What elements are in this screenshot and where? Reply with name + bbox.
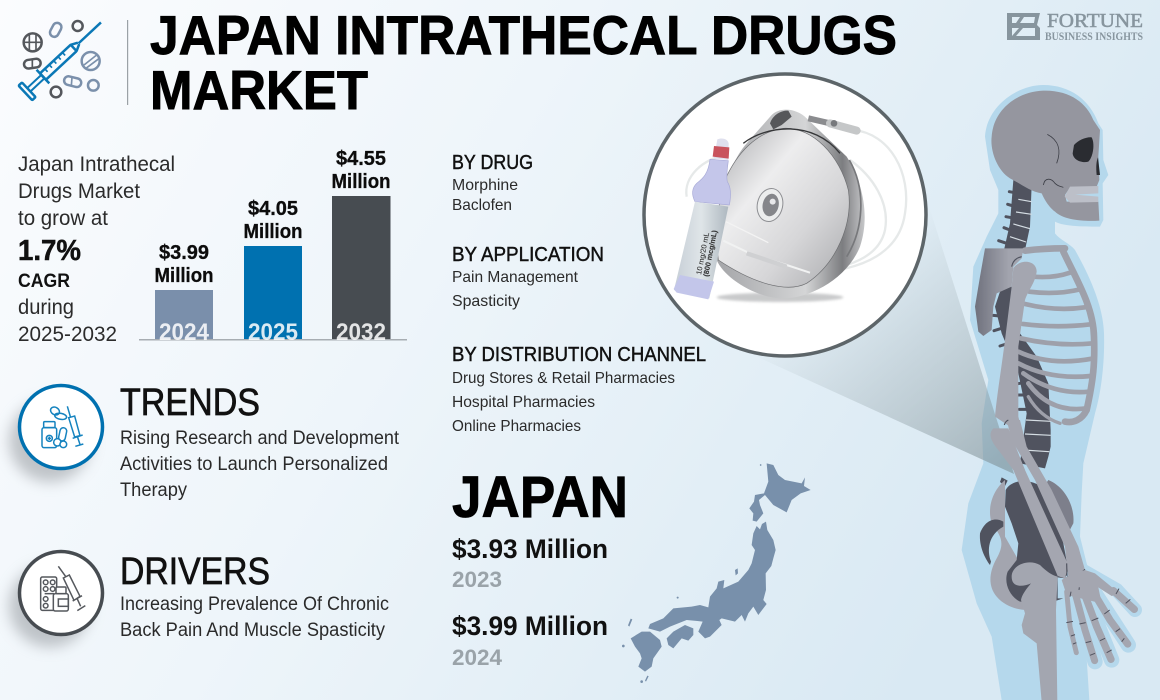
- humerus: [995, 262, 1037, 427]
- catheter tubes: [686, 130, 906, 273]
- bar chart: [139, 148, 407, 346]
- bar chart: 2025: [248, 319, 298, 346]
- panel: segmentation: Hospital Pharmacies: [452, 394, 595, 411]
- icon: syringe and pills: [19, 15, 108, 100]
- title: [150, 4, 897, 121]
- icon: drivers medicine: [9, 552, 102, 647]
- bar chart: 2024: [159, 319, 209, 346]
- vial label: 10 mg/20 mL: [694, 232, 711, 275]
- text block: CAGR summary: during: [18, 296, 74, 319]
- panel: segmentation: Spasticity: [452, 293, 520, 310]
- spine: [993, 180, 1051, 468]
- vial label: (800 mcg/mL): [701, 229, 719, 277]
- title: JAPAN INTRATHECAL DRUGS: [150, 4, 897, 66]
- logo: Fortune Business Insights: FORTUNE: [1047, 10, 1143, 32]
- forearm: [991, 420, 1085, 578]
- text block: CAGR summary: to grow at: [18, 207, 108, 230]
- text block: CAGR summary: Drugs Market: [18, 180, 140, 203]
- panel: Japan values: $3.99 Million: [452, 611, 608, 641]
- text block: CAGR summary: 1.7%: [18, 235, 81, 267]
- text block: CAGR summary: 2025-2032: [18, 323, 117, 346]
- connector: [808, 118, 830, 123]
- panel: segmentation: Drug Stores & Retail Pharmacies: [452, 370, 675, 387]
- text block: drivers: Back Pain And Muscle Spasticity: [120, 620, 385, 641]
- heading: drivers: DRIVERS: [120, 551, 270, 593]
- panel: segmentation: BY DRUG: [452, 152, 533, 174]
- vial label: [694, 227, 719, 277]
- bar chart: $3.99: [159, 242, 209, 264]
- illustration: skeleton: [727, 85, 1135, 700]
- panel: Japan values: 2024: [452, 645, 503, 670]
- divider: [127, 20, 128, 105]
- skull: [991, 91, 1100, 221]
- text block: trends: Therapy: [120, 480, 187, 501]
- panel: Japan values: JAPAN: [452, 465, 628, 530]
- panel: segmentation: Morphine: [452, 177, 518, 194]
- title: MARKET: [150, 59, 368, 121]
- text block: CAGR summary: Japan Intrathecal: [18, 153, 175, 176]
- panel: segmentation: BY DISTRIBUTION CHANNEL: [452, 344, 706, 366]
- map: Japan: [622, 463, 811, 683]
- pump shadow: [717, 293, 843, 302]
- panel: segmentation: Online Pharmacies: [452, 418, 581, 435]
- bar chart: Million: [332, 171, 390, 193]
- text block: trends: Rising Research and Development: [120, 428, 400, 449]
- vial: [674, 139, 731, 299]
- pump body: [716, 110, 865, 298]
- text block: trends: [120, 428, 400, 501]
- pelvis and leg: [980, 477, 1074, 700]
- callout cone: [727, 175, 1014, 474]
- panel: Japan values: 2023: [452, 567, 502, 592]
- image circle: pump and vial: [644, 74, 926, 356]
- logo: Fortune Business Insights: BUSINESS INSIGHTS: [1045, 31, 1143, 43]
- panel: Japan values: [452, 465, 628, 670]
- text block: drivers: [120, 594, 389, 641]
- bar chart: Million: [244, 221, 302, 243]
- logo: Fortune Business Insights: [1007, 10, 1143, 43]
- panel: Japan values: $3.93 Million: [452, 534, 608, 564]
- body outline: [962, 85, 1135, 700]
- bar chart: $4.05: [248, 198, 298, 220]
- scapula: [975, 248, 1023, 336]
- icon: trends medicine: [9, 386, 102, 482]
- bar chart: 2032: [336, 319, 386, 346]
- heading: trends: TRENDS: [120, 382, 260, 424]
- pump port: [754, 186, 786, 224]
- text block: drivers: Increasing Prevalence Of Chronic: [120, 594, 389, 615]
- panel: segmentation: BY APPLICATION: [452, 244, 604, 266]
- ribs: [1018, 248, 1094, 423]
- text block: CAGR summary: [18, 153, 175, 346]
- panel: segmentation: Pain Management: [452, 269, 579, 286]
- panel: segmentation: Baclofen: [452, 197, 512, 214]
- text block: trends: Activities to Launch Personalized: [120, 454, 388, 475]
- panel: trends: [9, 382, 400, 501]
- panel: segmentation: [452, 152, 706, 435]
- bar chart: $4.55: [336, 148, 386, 170]
- bar chart: Million: [154, 265, 214, 287]
- panel: drivers: [9, 551, 389, 647]
- hand: [1062, 570, 1134, 661]
- text block: CAGR summary: CAGR: [18, 271, 70, 292]
